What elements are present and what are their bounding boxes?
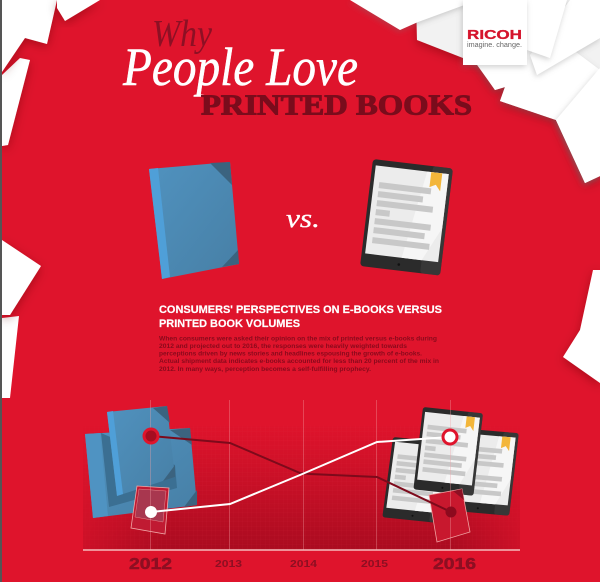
logo: Ricoh: RICOH [467, 28, 522, 42]
e-readers illustration 2016 [382, 407, 519, 524]
year labels: 2012 [129, 556, 172, 573]
title: Why [152, 13, 212, 55]
marker: printed 2012 [142, 428, 160, 444]
marker: e-books 2012 [145, 506, 157, 518]
title: People Love [122, 37, 358, 97]
logo: Ricoh [463, 0, 527, 65]
chart: e-books vs printed books 2012-2016 [83, 400, 520, 573]
chart plot area [83, 446, 520, 550]
axis [83, 549, 520, 551]
title [122, 13, 472, 122]
body text: 2012. In many ways, perception becomes a self-fulfilling prophecy. [159, 367, 371, 373]
year labels: 2014 [290, 559, 318, 570]
paper pile: left edge [2, 240, 41, 398]
paper pile: right edge [563, 270, 600, 383]
body text: 2012 and projected out to 2016, the responses were heavily weighted towards [159, 344, 408, 350]
year labels [129, 556, 476, 573]
body text: Actual shipment data indicates e-books accounted for less than 20 percent of the mix in [159, 359, 439, 365]
heading: consumers' perspectives: PRINTED BOOK VOLUMES [159, 318, 300, 330]
small e-reader icon 2012 [131, 486, 169, 534]
marker: e-books 2016 [442, 428, 458, 446]
body text: perceptions driven by news stories and headlines espousing the growth of e-books. [159, 352, 422, 358]
vs label: vs. [286, 204, 320, 233]
books illustration 2012 [85, 406, 197, 518]
heading: consumers' perspectives: CONSUMERS' PERSPECTIVES ON E-BOOKS VERSUS [159, 304, 442, 316]
logo: Ricoh: imagine. change. [467, 42, 522, 49]
year grid lines [150, 400, 450, 550]
paper pile: top-right [350, 0, 600, 183]
body text: When consumers were asked their opinion on the mix of printed versus e-books during [159, 336, 437, 342]
paper pile: top-left [2, 0, 100, 146]
year labels: 2013 [215, 559, 243, 570]
year labels: 2015 [361, 559, 389, 570]
line: printed books [151, 436, 451, 512]
illustration: printed book [149, 162, 239, 279]
marker: printed 2016 [446, 506, 456, 518]
title: PRINTED BOOKS [201, 90, 472, 122]
heading: consumers' perspectives [159, 304, 442, 330]
year labels: 2016 [433, 556, 476, 573]
illustration: e-reader [360, 159, 453, 276]
line: e-books [151, 437, 450, 512]
small book icon 2016 [429, 489, 470, 542]
body text [159, 336, 439, 373]
